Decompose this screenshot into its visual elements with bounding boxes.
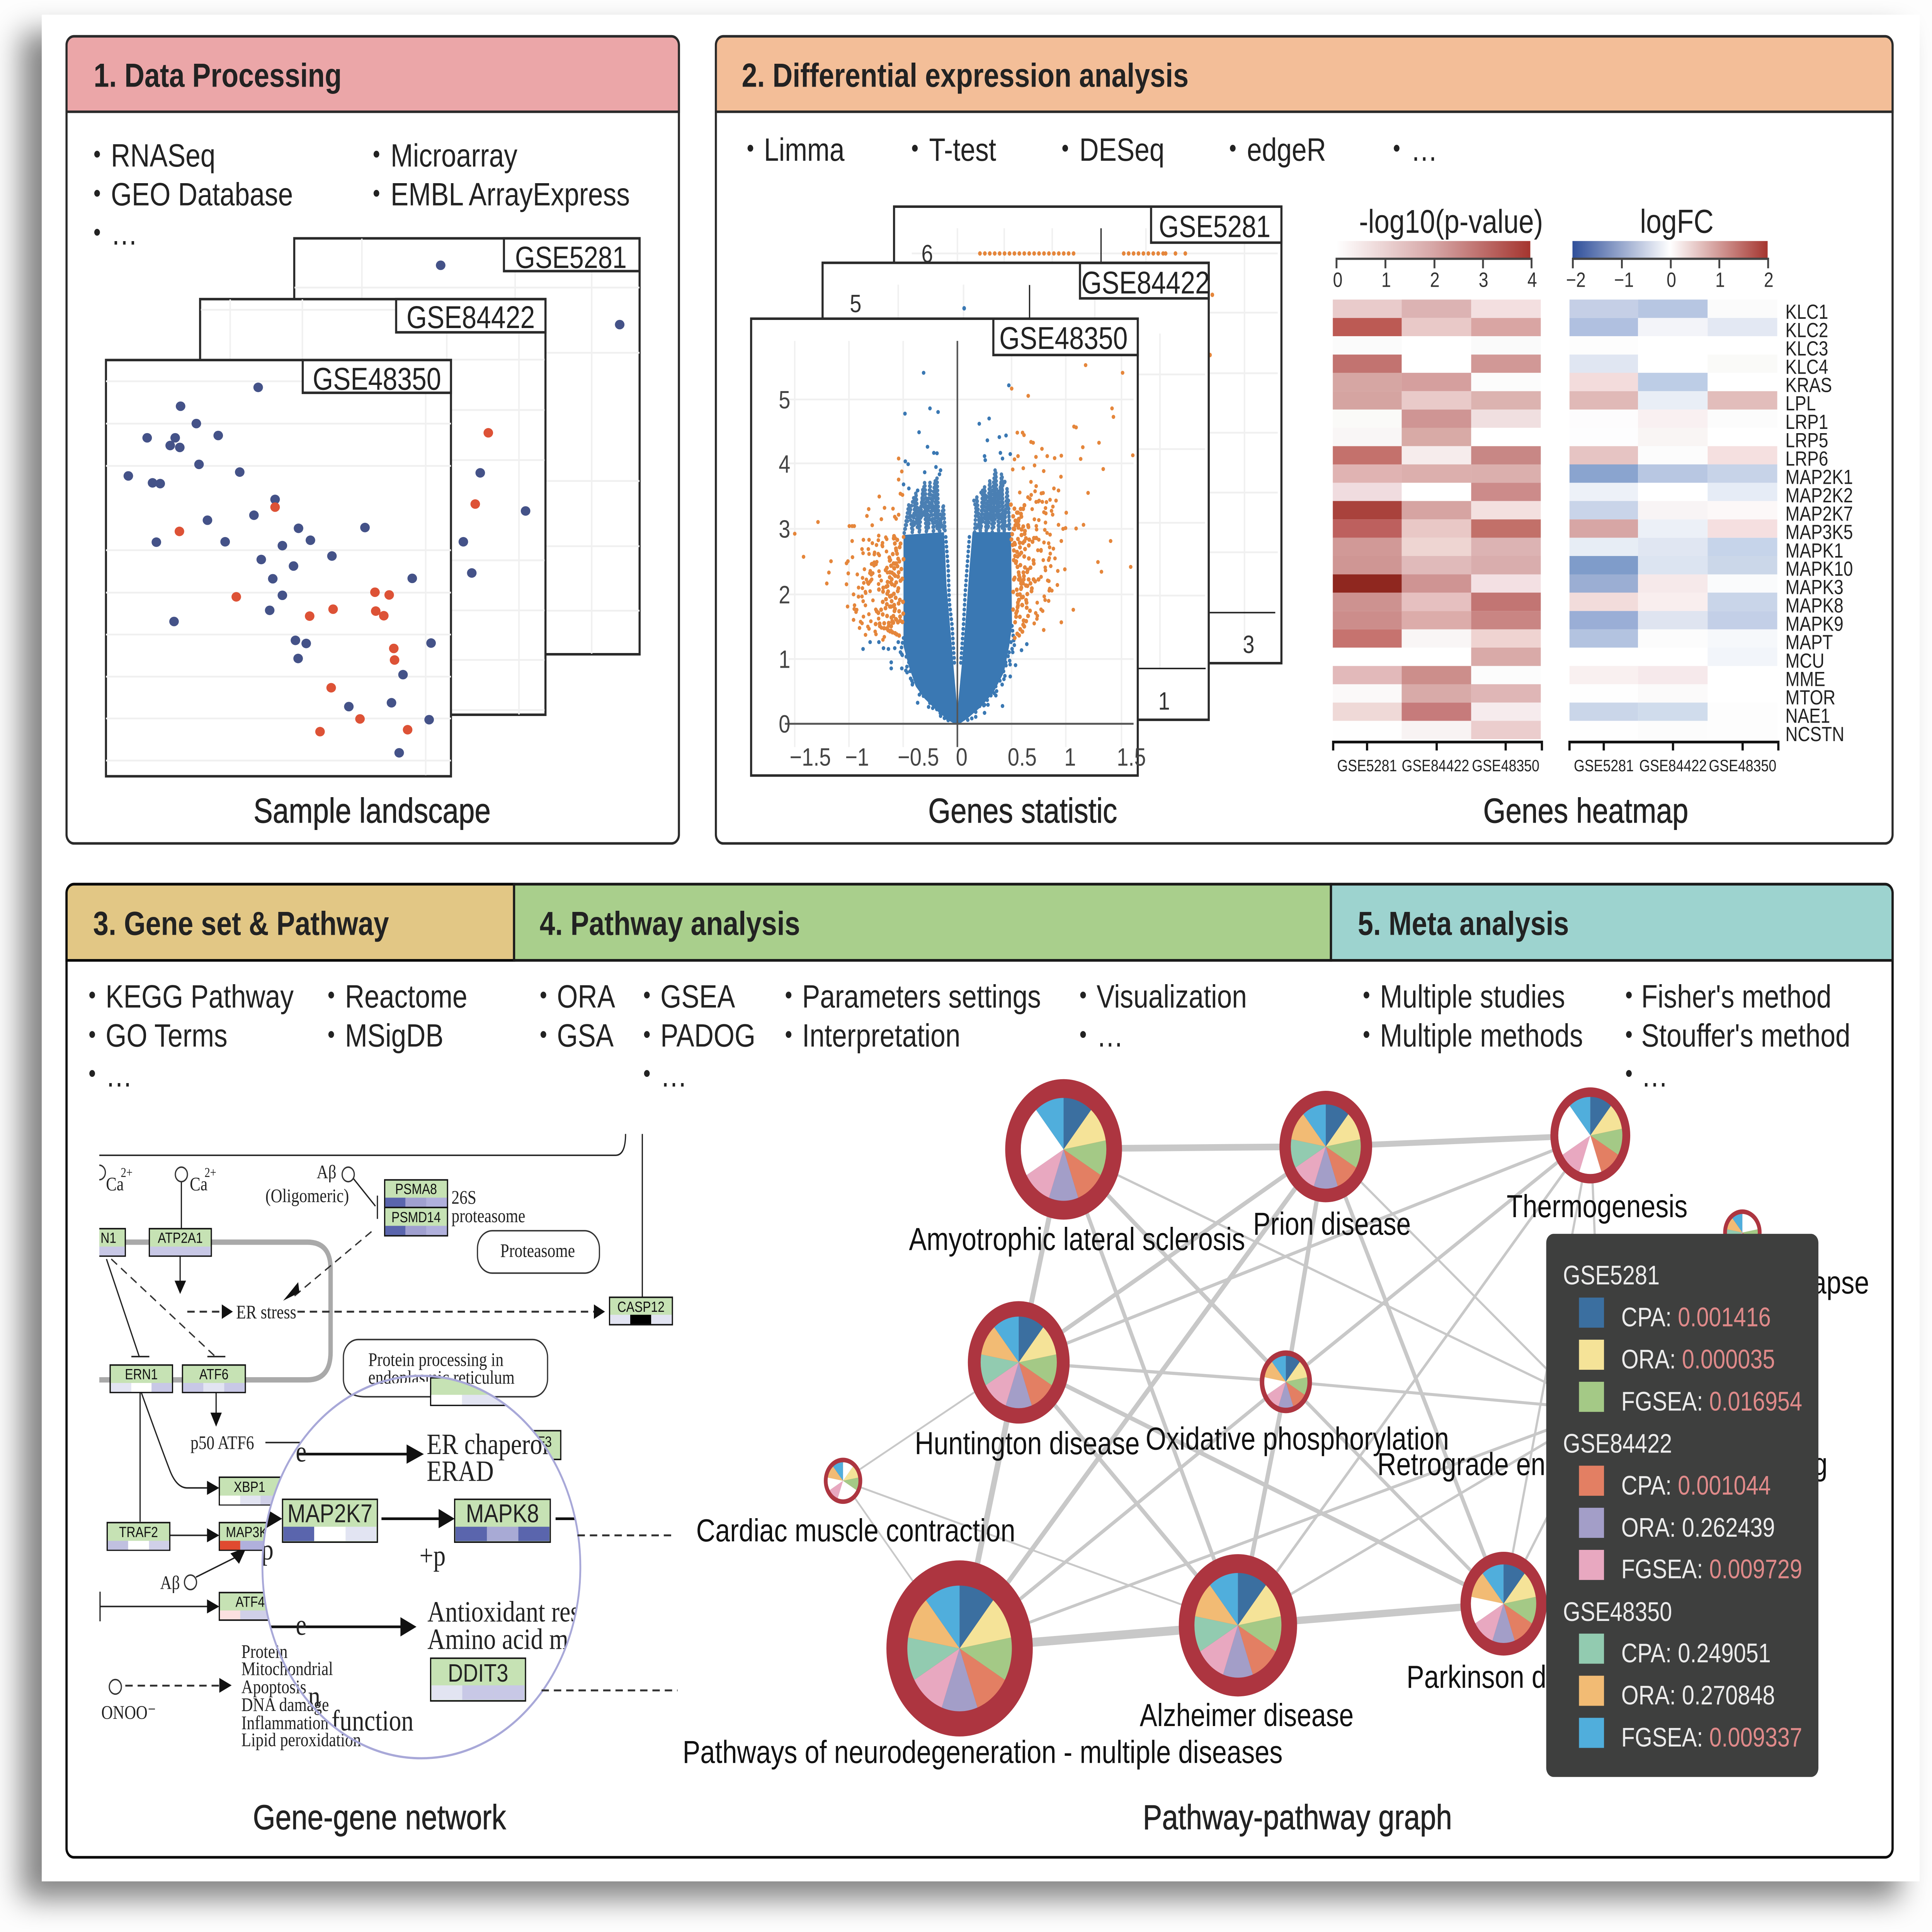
plot: GSE5281 volcano [894,207,1281,663]
panel: 1. Data Processing [66,36,679,844]
bullet list: meta analysis: Stouffer's method [1641,1018,1850,1054]
heading: Meta analysis [1331,884,1893,960]
heatmap column axes: GSE48350 [1472,757,1539,775]
bullet list: pathway methods: Visualization [1097,978,1247,1015]
heatmap gene labels: MAPT [1786,631,1833,654]
heatmap gene labels: MTOR [1786,686,1835,709]
dashed connectors from lens [541,1535,678,1690]
node labels: Oxidative phosphorylation [1146,1421,1449,1457]
x axis labels: −1.5 [789,743,831,771]
network labels: proteasome [451,1205,525,1226]
plot: GSE84422 volcano: 1 [1158,687,1170,715]
heatmap gene labels: MAPK3 [1786,576,1844,599]
chart: stacked volcano plots [751,207,1281,776]
gene node: ATP2A1: ATP2A1 [158,1230,203,1246]
magnified node: MAPK8 [455,1499,550,1542]
magnified contents: e [296,1609,307,1642]
chart: pathway-pathway graph [683,1079,1869,1777]
tooltip group: GSE48350: GSE48350 [1563,1597,1672,1627]
network lines [99,1134,642,1693]
bullet list: pathway methods: Parameters settings [802,978,1041,1015]
colour legend: logFC [1566,241,1774,291]
magnified contents: Apoptosis [242,1676,306,1697]
gene node: partial F3 [493,1431,561,1459]
magnified node: DDIT3 [430,1658,526,1701]
y axis labels [779,386,790,738]
volcano points [795,365,1133,725]
heatmap gene labels: MCU [1786,650,1824,672]
x axis labels: 1 [1064,743,1076,771]
magnified node: MAP2K7 [282,1499,378,1542]
heatmap column axes: GSE5281 [1574,757,1634,775]
magnified contents: Lipid peroxidation [242,1729,361,1750]
heatmap gene labels: MAP3K5 [1786,521,1853,544]
tooltip: node p-values [1546,1234,1818,1777]
heatmap gene labels: MME [1786,668,1825,690]
x axis labels: 0 [956,743,968,771]
colour legend: -log10(p-value) [1333,241,1537,291]
bullet list: gene sets [92,978,468,1094]
panel: lower sections 3, 4 and 5 [66,884,1893,1857]
plot: GSE84422 volcano: 5 [850,289,861,318]
network labels: Ca [190,1173,207,1194]
gene node: CASP12 [609,1297,672,1325]
magnified contents: p [261,1533,274,1566]
heatmap gene labels: LRP6 [1786,447,1828,470]
network labels: Lipid peroxidation [242,1729,361,1750]
heatmap title: logFC: logFC [1640,202,1714,240]
network labels: Apoptosis [242,1676,306,1697]
gene node: ERN1: ERN1 [125,1366,158,1383]
x axis labels: −1 [845,743,869,771]
magnified contents: e [296,1435,307,1468]
node labels [683,1189,1869,1770]
heatmap column axes: GSE5281 [1337,757,1397,775]
bullet list: pathway methods: … [660,1058,687,1094]
network labels: Protein processing in [368,1349,503,1370]
node labels: Prion disease [1253,1206,1411,1242]
tooltip group: GSE5281: GSE5281 [1563,1260,1660,1290]
node: synapse [1723,1209,1762,1256]
heatmap column axes [1333,742,1778,775]
gene node: ATF6: ATF6 [199,1366,228,1383]
magnified contents: +p [419,1539,446,1572]
x axis labels [789,743,1146,771]
bullet list: data sources: EMBL ArrayExpress [391,177,630,213]
tooltip group: GSE5281: CPA: 0.001416 [1621,1302,1771,1332]
network labels: 2+ [121,1165,133,1180]
network labels: Ca [106,1173,124,1194]
heatmap gene labels: LPL [1786,392,1816,415]
network labels: Inflammation [242,1712,328,1733]
tooltip group: GSE48350: CPA: 0.249051 [1621,1638,1771,1668]
magnified contents: Inflammation [242,1712,328,1733]
y axis labels: 1 [779,645,790,673]
colour legend: logFC: −1 [1614,268,1634,291]
gene node: N1: N1 [100,1230,116,1246]
bullet list: pathway methods: PADOG [660,1018,755,1054]
tooltip group: GSE84422: ORA: 0.262439 [1621,1512,1775,1543]
heading: Gene set and Pathway: 3. Gene set & Pathway [93,905,389,942]
caption: Genes heatmap: Genes heatmap [1483,792,1688,830]
magnified node: MAPK8: MAPK8 [466,1499,539,1528]
panel frame [66,36,679,844]
heatmap gene labels: MAPK9 [1786,613,1844,636]
colour legend: logFC: −2 [1566,268,1586,291]
plot: GSE48350 volcano: GSE48350 [999,320,1128,355]
bullet list: meta analysis: … [1641,1058,1668,1094]
gene node: XBP1: XBP1 [234,1479,265,1495]
plot: GSE84422: GSE84422 [406,299,535,335]
x axis labels: 0.5 [1008,743,1037,771]
bullet list: methods: T-test [929,132,996,168]
caption: Genes statistic: Genes statistic [928,792,1117,830]
plot: GSE48350: GSE48350 [313,361,441,396]
bullet list: pathway methods: … [1097,1018,1124,1054]
node: Thermogenesis [1550,1087,1630,1184]
node labels: Amyotrophic lateral sclerosis [909,1221,1245,1257]
heatmap gene labels [1786,301,1853,746]
network labels: ER stress [236,1301,296,1323]
node: Pathways of neurodegeneration [886,1560,1033,1736]
node: Oxidative phosphorylation [1260,1350,1312,1413]
caption: Sample landscape: Sample landscape [253,792,491,830]
gene node: PSMA8: PSMA8 [395,1181,437,1197]
bullet list: pathway methods: Interpretation [802,1018,960,1054]
bullet list: meta analysis [1366,978,1850,1094]
y axis labels: 0 [779,710,790,738]
heading: Meta analysis: 5. Meta analysis [1358,905,1569,942]
plot: GSE84422 [200,299,546,715]
gene node: PSMD14: PSMD14 [391,1209,441,1226]
gene node: XBP1 [219,1477,281,1505]
network labels: Proteasome [500,1240,575,1261]
heatmap column axes: GSE84422 [1402,757,1469,775]
node labels: Pathways of neurodegeneration - multiple diseases [683,1735,1283,1770]
tooltip group: GSE5281: FGSEA: 0.016954 [1621,1386,1802,1417]
tooltip group: GSE5281 [1563,1260,1802,1417]
tooltip group: GSE5281: ORA: 0.000035 [1621,1344,1775,1374]
bullet list: pathway methods [543,978,1247,1094]
caption: Gene-gene network: Gene-gene network [253,1798,506,1837]
node labels: Huntington disease [915,1426,1140,1461]
plot: GSE5281 [294,238,639,654]
network labels: Aβ [317,1161,337,1183]
network labels: 2+ [204,1165,216,1180]
gene node: MAP3K5 [219,1522,281,1550]
bullet list: meta analysis: Multiple studies [1380,978,1565,1015]
plot: GSE48350 [106,360,451,776]
tooltip group: GSE48350: FGSEA: 0.009337 [1621,1722,1802,1752]
network labels: 26S [451,1186,476,1208]
heatmap gene labels: KLC4 [1786,356,1828,378]
bullet list: meta analysis: Fisher's method [1641,978,1832,1015]
heatmap gene labels: MAP2K2 [1786,484,1853,507]
heatmap gene labels: LRP5 [1786,429,1828,452]
network labels: endoplasmic reticulum [368,1366,515,1388]
plot: GSE5281 volcano: 6 [921,240,933,268]
panel: 2. Differential expression analysis [716,36,1893,844]
magnified contents: function [332,1704,413,1737]
gene node: partial F3: F3 [537,1434,552,1450]
bullet list: methods: edgeR [1247,132,1326,168]
network labels [93,1161,599,1750]
heatmap gene labels: MAPK10 [1786,558,1853,580]
chart: KEGG gene-gene network [86,1134,678,1758]
x axis labels: −0.5 [898,743,939,771]
node labels: Retrograde endocannabinoid signaling [1377,1447,1828,1482]
gene node: TRAF2 [107,1522,170,1550]
heatmap gene labels: MAPK1 [1786,539,1844,562]
tooltip group: GSE48350: ORA: 0.270848 [1621,1680,1775,1710]
bullet list: data sources [97,138,630,252]
magnifier lens [242,1366,664,1758]
heatmap title: -log10(p-value): -log10(p-value) [1359,203,1543,240]
heading: Gene set and Pathway [66,884,514,960]
node labels: Alzheimer disease [1140,1697,1354,1733]
chart: sample landscape stacked scatter plots [106,238,639,776]
panel frame [66,884,1893,1857]
colour legend: -log10(p-value): 4 [1527,268,1537,291]
magnified contents: Amino acid metabolism [427,1623,664,1656]
caption: Pathway-pathway graph: Pathway-pathway graph [1143,1798,1452,1837]
node: Cardiac muscle contraction [824,1458,862,1504]
gene node: ATP2A1 [149,1229,211,1256]
gene node: PSMD14 [385,1208,447,1236]
panel frame [716,36,1893,844]
gene node: PSMA8 [385,1180,447,1208]
y axis labels: 2 [779,581,790,609]
node labels: Dopaminergic synapse [1600,1265,1869,1301]
tooltip group: GSE84422 [1563,1428,1802,1584]
magnified node: MAP2K7: MAP2K7 [287,1499,372,1528]
tooltip group: GSE84422: CPA: 0.001044 [1621,1470,1771,1500]
colour legend: logFC: 0 [1667,268,1676,291]
node: Prion disease [1279,1091,1372,1202]
heading: Pathway analysis [514,884,1331,960]
magnified contents: Mitochondrial [242,1658,333,1679]
node: Amyotrophic lateral sclerosis [1005,1079,1122,1219]
plot: GSE84422 volcano: GSE84422 [1081,265,1210,300]
heatmap gene labels: MAPK8 [1786,594,1844,617]
heatmap gene labels: KLC3 [1786,337,1828,360]
node labels: Parkinson disease [1406,1659,1623,1695]
gene node: MAP3K5: MAP3K5 [226,1524,274,1541]
gene node: CASP12: CASP12 [617,1299,665,1315]
magnified contents: n [308,1680,320,1713]
network labels: DNA damage [242,1694,329,1715]
tooltip group: GSE48350 [1563,1597,1802,1752]
gene node: ATF6 [182,1365,245,1393]
heatmap gene labels: NCSTN [1786,723,1844,746]
heatmap: -log10(p-value) and logFC cells [1333,299,1777,739]
heatmap gene labels: KRAS [1786,374,1832,397]
bullet list: gene sets: GO Terms [105,1018,228,1054]
node labels: Cardiac muscle contraction [696,1513,1015,1548]
plot: GSE5281: GSE5281 [515,240,627,275]
y axis labels: 4 [779,450,790,478]
bullet list: data sources: Microarray [391,138,518,173]
network labels: Aβ [160,1572,180,1593]
bullet list: gene sets: Reactome [345,978,468,1015]
plot: GSE5281 volcano: 3 [1243,630,1255,658]
gene node: ATF4: ATF4 [236,1594,265,1610]
node: Alzheimer disease [1179,1554,1297,1696]
bullet list: methods [750,132,1438,168]
magnified contents: Antioxidant response [427,1595,638,1628]
gene node: ERN1 [110,1365,172,1393]
magnified contents: Protein [242,1641,287,1662]
heading: Data Processing: 1. Data Processing [94,56,342,94]
heatmap gene labels: KLC2 [1786,319,1828,342]
y axis labels: 5 [779,386,790,414]
heatmap column axes: GSE84422 [1639,757,1707,775]
bullet list: meta analysis: Multiple methods [1380,1018,1583,1054]
node: Huntington disease [968,1301,1070,1423]
colour legend: -log10(p-value): 2 [1430,268,1440,291]
network labels: Mitochondrial [242,1658,333,1679]
colour legend: -log10(p-value): 0 [1333,268,1342,291]
plot: GSE48350 volcano [751,319,1146,776]
colour legend: logFC: 1 [1715,268,1725,291]
magnified contents: DNA damage [242,1694,329,1715]
magnified contents: ER chaperones [427,1428,575,1461]
bullet list: data sources: GEO Database [111,177,293,213]
bullet list: gene sets: … [105,1058,133,1094]
magnified contents: endoplasmic reticulum [368,1366,515,1388]
heading: Pathway analysis: 4. Pathway analysis [540,905,800,942]
network labels: ONOO⁻ [101,1701,156,1723]
y axis labels: 3 [779,515,790,543]
heatmap column axes: GSE48350 [1709,757,1776,775]
plot: GSE5281 volcano: GSE5281 [1159,209,1270,244]
gene node: ATF4 [219,1593,281,1620]
x axis labels: 1.5 [1117,743,1146,771]
heading: Differential expression analysis [716,36,1893,112]
heatmap gene labels: LRP1 [1786,411,1828,434]
tooltip group: GSE84422: FGSEA: 0.009729 [1621,1554,1802,1584]
heatmap gene labels: KLC1 [1786,301,1828,323]
gene node: TRAF2: TRAF2 [119,1524,158,1541]
plot: GSE84422 volcano [823,263,1210,720]
heatmap gene labels: NAE1 [1786,705,1830,727]
bullet list: gene sets: KEGG Pathway [105,978,294,1015]
bullet list: pathway methods: ORA [557,978,616,1015]
bullet list: pathway methods: GSA [557,1018,614,1054]
magnified node: DDIT3: DDIT3 [448,1659,509,1687]
bullet list: data sources: RNASeq [111,138,215,173]
heading: Data Processing [66,36,679,112]
heading: Differential expression analysis: 2. Differential expression analysis [742,56,1189,94]
network labels: p50 ATF6 [190,1432,254,1453]
network labels: Protein [242,1641,287,1662]
tooltip group: GSE84422: GSE84422 [1563,1428,1672,1459]
colour legend: -log10(p-value): 3 [1479,268,1488,291]
bullet list: methods: … [1411,132,1438,168]
network labels: (Oligomeric) [265,1185,349,1206]
node labels: Thermogenesis [1507,1189,1687,1225]
gene node: N1 [86,1229,125,1256]
graph edges [843,1135,1602,1648]
bullet list: data sources: … [111,216,138,252]
bullet list: gene sets: MSigDB [345,1018,444,1054]
bullet list: methods: Limma [764,132,845,168]
colour legend: logFC: 2 [1764,268,1774,291]
node: Parkinson disease [1461,1552,1547,1656]
heatmap gene labels: MAP2K7 [1786,503,1853,526]
colour legend: -log10(p-value): 1 [1381,268,1391,291]
bullet list: pathway methods: GSEA [660,978,735,1015]
magnified contents [242,1366,664,1750]
bullet list: methods: DESeq [1079,132,1165,168]
magnified contents: ERAD [427,1455,494,1488]
heatmap gene labels: MAP2K1 [1786,466,1853,488]
